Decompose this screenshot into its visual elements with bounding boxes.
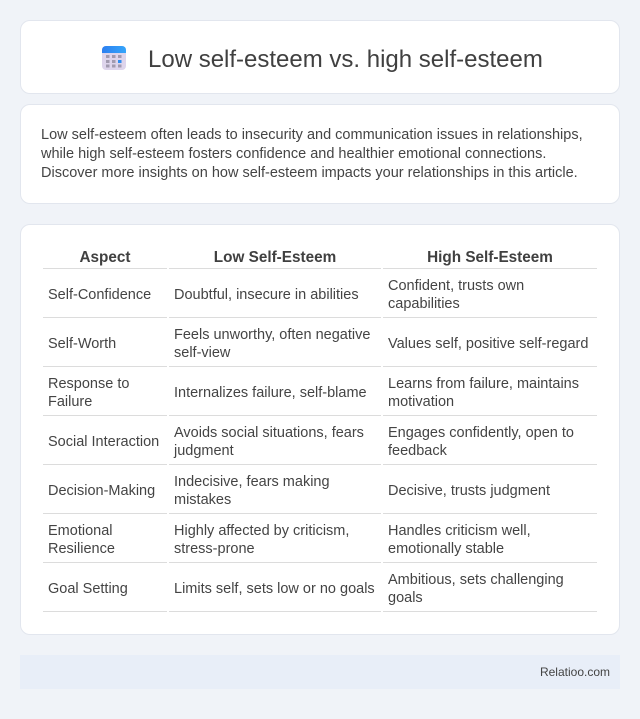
comparison table bbox=[43, 249, 597, 612]
text: Self-Worth bbox=[48, 336, 116, 352]
text: capabilities bbox=[388, 296, 460, 312]
text: goals bbox=[388, 590, 423, 606]
text: Goal Setting bbox=[48, 581, 128, 597]
text: Social Interaction bbox=[48, 434, 159, 450]
text: Learns from failure, maintains bbox=[388, 376, 579, 392]
text: motivation bbox=[388, 394, 454, 410]
text: stress-prone bbox=[174, 541, 255, 557]
text: mistakes bbox=[174, 492, 231, 508]
row: goal setting bbox=[48, 572, 564, 606]
table card bbox=[20, 224, 620, 635]
text: Handles criticism well, bbox=[388, 523, 531, 539]
text: feedback bbox=[388, 443, 447, 459]
text: Resilience bbox=[48, 541, 115, 557]
intro text: Discover more insights on how self-esteem impacts your relationships in this article. bbox=[41, 165, 578, 181]
text: Feels unworthy, often negative bbox=[174, 327, 370, 343]
row: self-confidence bbox=[48, 278, 524, 312]
text: Emotional bbox=[48, 523, 112, 539]
text: judgment bbox=[174, 443, 234, 459]
row: response to failure bbox=[48, 376, 579, 410]
text: Internalizes failure, self-blame bbox=[174, 385, 367, 401]
row: self-worth bbox=[48, 327, 588, 361]
text: Values self, positive self-regard bbox=[388, 336, 588, 352]
text: Decision-Making bbox=[48, 483, 155, 499]
text: emotionally stable bbox=[388, 541, 504, 557]
header: aspect: Aspect bbox=[79, 249, 130, 266]
intro card bbox=[20, 104, 620, 204]
text: Ambitious, sets challenging bbox=[388, 572, 564, 588]
title card bbox=[20, 20, 620, 94]
text: Response to bbox=[48, 376, 129, 392]
footer bar bbox=[20, 655, 620, 689]
text: Highly affected by criticism, bbox=[174, 523, 349, 539]
title: Low self-esteem vs. high self-esteem bbox=[148, 46, 543, 73]
text: Confident, trusts own bbox=[388, 278, 524, 294]
header: low self-esteem: Low Self-Esteem bbox=[214, 249, 336, 266]
text: Failure bbox=[48, 394, 92, 410]
footer brand: Relatioo.com bbox=[540, 665, 610, 679]
text: Self-Confidence bbox=[48, 287, 151, 303]
icon: calendar bbox=[102, 46, 126, 70]
row: decision-making bbox=[48, 474, 550, 508]
header: high self-esteem: High Self-Esteem bbox=[427, 249, 553, 266]
text: Decisive, trusts judgment bbox=[388, 483, 550, 499]
text: Engages confidently, open to bbox=[388, 425, 574, 441]
intro text bbox=[41, 127, 583, 181]
text: Indecisive, fears making bbox=[174, 474, 330, 490]
text: Limits self, sets low or no goals bbox=[174, 581, 375, 597]
text: Doubtful, insecure in abilities bbox=[174, 287, 359, 303]
row: social interaction bbox=[48, 425, 574, 459]
intro text: while high self-esteem fosters confidence and healthier emotional connections. bbox=[41, 146, 546, 162]
text: self-view bbox=[174, 345, 230, 361]
row: emotional resilience bbox=[48, 523, 531, 557]
intro text: Low self-esteem often leads to insecurity and communication issues in relationships, bbox=[41, 127, 583, 143]
text: Avoids social situations, fears bbox=[174, 425, 364, 441]
